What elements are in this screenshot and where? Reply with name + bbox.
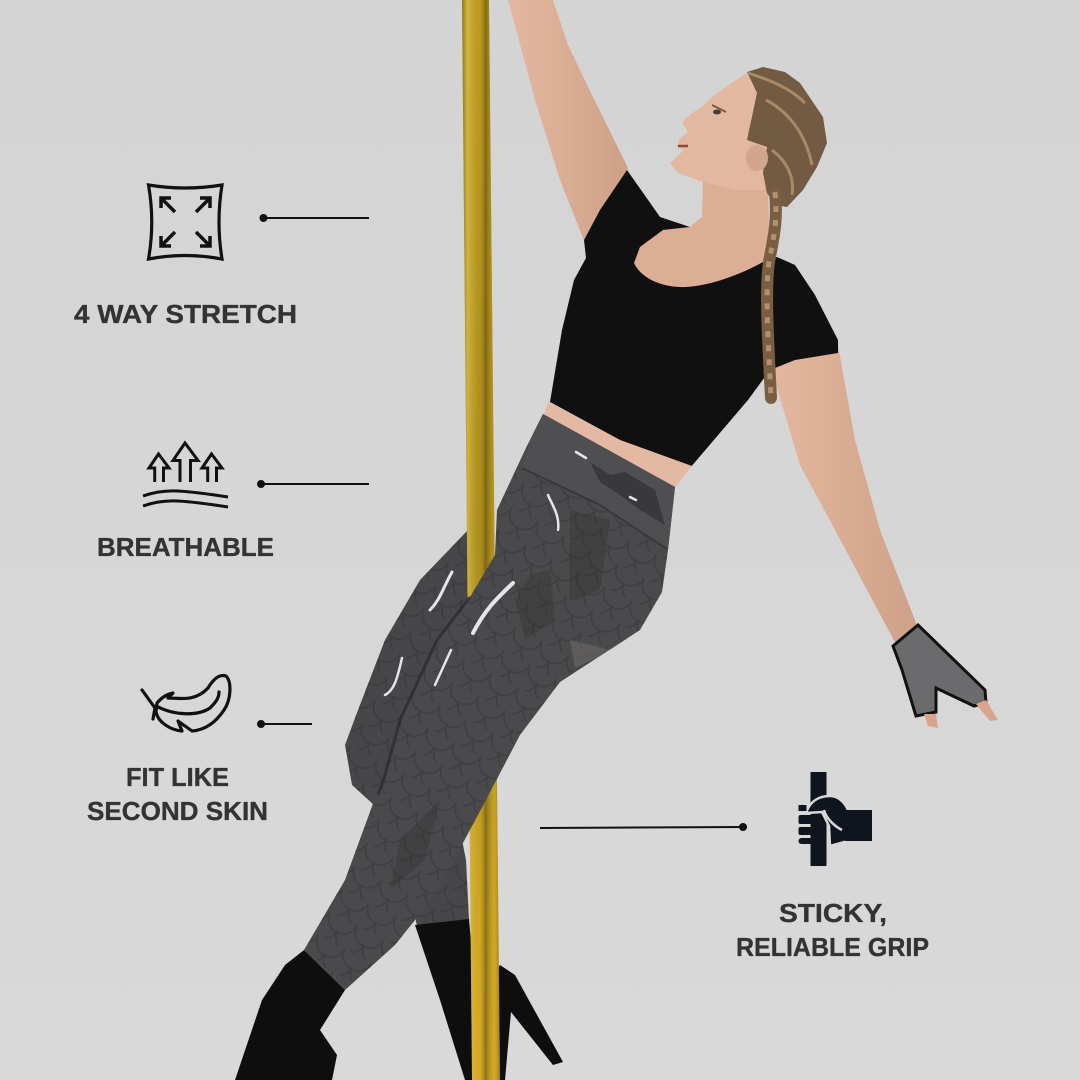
black t-shirt	[550, 170, 838, 468]
label: 4 WAY STRETCH	[74, 299, 297, 329]
waistband	[522, 414, 675, 550]
label	[736, 898, 929, 962]
dark leg shadows	[390, 510, 610, 890]
near legging	[304, 414, 675, 990]
raised arm	[508, 0, 628, 243]
fingers	[924, 700, 998, 728]
far leg and boot	[345, 530, 563, 1080]
lighter hip sheen	[570, 630, 640, 668]
connector line	[257, 720, 312, 728]
lowered arm	[770, 345, 918, 648]
head	[670, 73, 770, 190]
icon: feather	[142, 676, 230, 731]
label: STICKY,	[779, 898, 887, 928]
label: FIT LIKE	[126, 762, 229, 792]
icon: stretch square	[148, 185, 222, 259]
label	[87, 762, 268, 826]
connector line	[260, 214, 369, 222]
icon: hand gripping pole	[798, 772, 872, 866]
connector line	[540, 823, 747, 831]
label: SECOND SKIN	[87, 796, 268, 826]
label: RELIABLE GRIP	[736, 932, 929, 962]
feature: breathable	[97, 443, 369, 562]
figure	[235, 0, 998, 1080]
shiny highlights	[385, 452, 636, 695]
feature: sticky reliable grip	[540, 772, 929, 962]
near boot	[235, 950, 345, 1080]
connector line	[257, 480, 369, 488]
neck and chest	[630, 160, 770, 292]
seam between legs	[378, 597, 470, 795]
hair	[747, 67, 827, 207]
glove	[893, 625, 986, 716]
icon: rising arrows and waves	[143, 443, 228, 507]
ear	[746, 145, 768, 171]
pole	[462, 0, 500, 1080]
facial features	[678, 105, 726, 146]
braid	[767, 192, 776, 398]
far boot	[415, 919, 563, 1080]
black flakes on waistband	[590, 462, 665, 525]
feature: fit like second skin	[87, 676, 312, 826]
feature: 4 way stretch	[74, 185, 369, 329]
midriff	[543, 402, 692, 490]
far legging	[345, 530, 470, 926]
label: BREATHABLE	[97, 532, 274, 562]
